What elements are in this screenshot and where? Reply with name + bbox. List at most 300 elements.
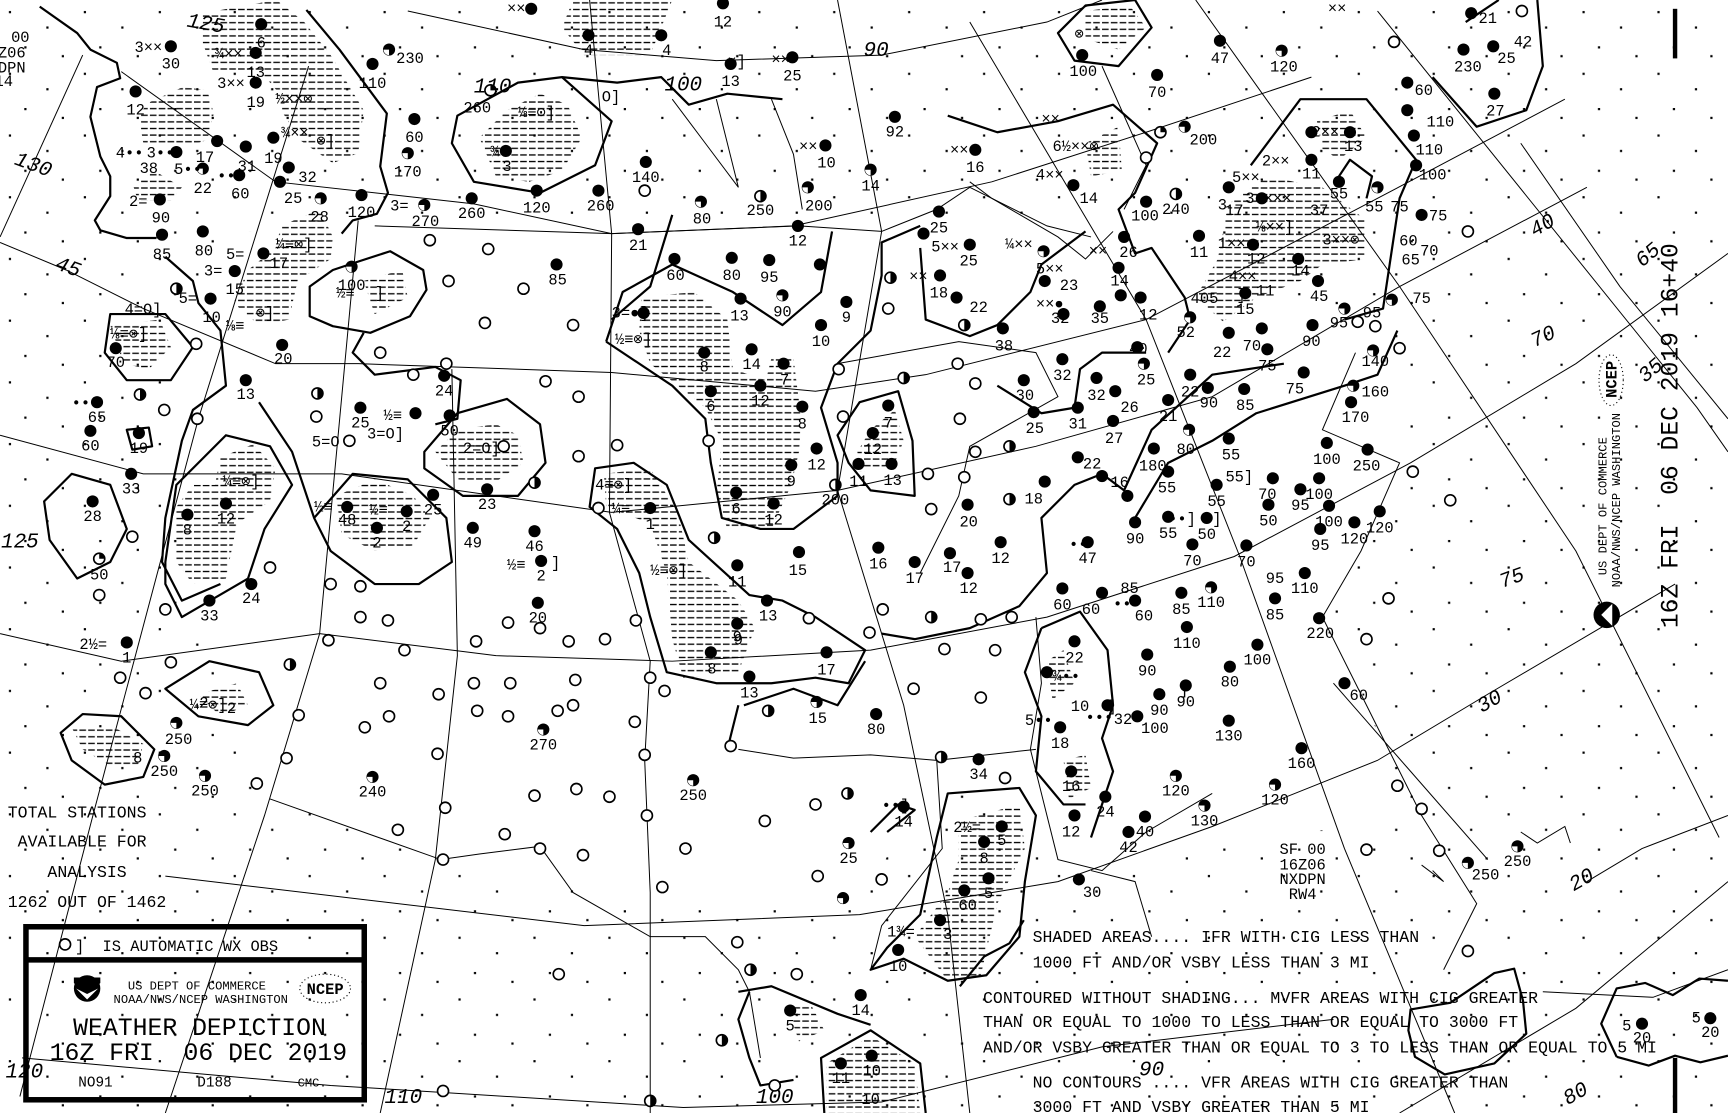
station values: 250 [150, 763, 178, 781]
station values: 100 [1244, 651, 1271, 669]
station values: 13 [237, 386, 255, 404]
grid degree labels: 75 [1497, 564, 1528, 595]
station values: 90 [1302, 333, 1321, 351]
station values: 49 [464, 535, 482, 553]
grid degree labels: 100 [756, 1087, 794, 1110]
present weather symbols: 3×××× [1245, 190, 1292, 208]
present weather symbols: ¼≡⊗] [190, 697, 227, 715]
station values: 70 [107, 354, 125, 372]
station values: 9 [734, 632, 743, 650]
present weather symbols: ¾ [490, 143, 500, 161]
present weather symbols: ] [1179, 681, 1188, 699]
grid degree labels: 70 [1527, 322, 1560, 354]
station values: 110 [1173, 635, 1201, 653]
present weather symbols: 2=O] [463, 440, 500, 458]
station values: 9 [733, 628, 742, 646]
station values: 28 [310, 208, 329, 226]
explanatory notes: CONTOURED WITHOUT SHADING... MVFR AREAS WITH CIG GREATER [983, 989, 1538, 1008]
station values: 22 [194, 180, 212, 198]
present weather symbols: 5•• [174, 161, 202, 179]
station values: 32 [1051, 310, 1069, 328]
station values: 23 [1060, 277, 1078, 295]
station values: 14 [742, 356, 761, 374]
station values: 85 [1120, 580, 1139, 598]
station values: 90 [152, 210, 170, 228]
station values: 11 [1256, 282, 1274, 300]
present weather symbols: ½≡⊗] [615, 331, 652, 349]
station values: 5 [997, 832, 1006, 850]
station values: 14 [1110, 272, 1129, 290]
present weather symbols: 4≡⊗] [595, 476, 632, 494]
grid degree labels: 120 [5, 1062, 43, 1085]
present weather symbols: ¼≡ [612, 501, 630, 519]
present weather symbols: 3= [204, 262, 222, 280]
station values: 100 [1069, 63, 1097, 81]
station values: 260 [587, 197, 615, 215]
station values: 230 [396, 50, 424, 68]
present weather symbols: 5= [226, 246, 244, 264]
station values: 85 [153, 246, 171, 264]
station values: 13 [721, 73, 740, 91]
top-left header fragment [0, 29, 30, 91]
station values: 42 [1119, 839, 1138, 857]
present weather symbols: ¼≡⊗] [223, 473, 260, 491]
station values: 33 [122, 481, 140, 499]
station values: 2 [536, 568, 546, 586]
station values: 240 [1162, 201, 1190, 219]
station values: 60 [1135, 607, 1153, 625]
station values: 75 [1286, 380, 1304, 398]
station values: 250 [1504, 853, 1531, 871]
station values: 32 [1114, 711, 1132, 729]
station values: 14 [851, 1002, 870, 1020]
station values: 95 [1330, 314, 1348, 332]
station values: 100 [1315, 514, 1343, 532]
left text: total stations: AVAILABLE FOR [18, 832, 147, 851]
station values: 120 [523, 200, 551, 218]
present weather symbols: ½××⊗ [276, 91, 313, 109]
coastlines and borders [270, 66, 1728, 1058]
icon: side NCEP logo: NCEP [1604, 361, 1622, 398]
station values: 12 [1139, 307, 1158, 325]
present weather symbols: ⅛≡ [226, 318, 244, 336]
present weather symbols: ¾×× [215, 45, 243, 63]
station values: 14 [1291, 262, 1310, 280]
present weather symbols: 2×× [1311, 124, 1339, 142]
analysis code block: NXDPN [1279, 871, 1326, 889]
side date label: 16Z FRI 06 DEC 2019 16+40 [1657, 243, 1685, 628]
station values: 65 [1401, 251, 1420, 269]
station values: 70 [1148, 84, 1166, 102]
registration bars [1673, 9, 1677, 1113]
grid degree labels: 40 [1527, 211, 1560, 243]
station values: 30 [1016, 387, 1034, 405]
station values: 85 [1172, 601, 1191, 619]
IFR shaded areas [72, 0, 1367, 1113]
present weather symbols: 5=O [312, 433, 340, 451]
station values: 85 [1266, 606, 1284, 624]
present weather symbols: 4×× [1036, 167, 1064, 185]
station values: 8 [707, 660, 717, 678]
station values: 80 [693, 211, 711, 229]
present weather symbols: 5×× [931, 238, 959, 256]
automatic observation key: ] [75, 938, 84, 956]
station values: 60 [1415, 82, 1433, 100]
grid degree labels: 65 [1632, 239, 1666, 273]
station values: 170 [1342, 409, 1369, 427]
station values: 95 [1291, 497, 1310, 515]
station values: 60 [1350, 687, 1368, 705]
station values: 22 [1083, 455, 1101, 473]
explanatory notes: 1000 FT AND/OR VSBY LESS THAN 3 MI [1033, 954, 1370, 973]
station values: 250 [1472, 866, 1499, 884]
present weather symbols: •• [1113, 595, 1132, 613]
station values: 85 [1236, 397, 1255, 415]
grid degree labels: 35 [1635, 355, 1669, 389]
station values: 270 [529, 736, 557, 754]
present weather symbols: ⅛≡⊗] [110, 325, 147, 343]
station values: 17 [905, 570, 924, 588]
station values: 90 [773, 303, 792, 321]
station values: 405 [1191, 290, 1218, 308]
station values: 18 [1051, 735, 1069, 753]
present weather symbols: 3=●] [612, 304, 649, 322]
station values: 12 [217, 510, 235, 528]
grid degree labels: 130 [11, 149, 54, 183]
present weather symbols: 5 [1622, 1017, 1631, 1035]
station values: 20 [274, 351, 293, 369]
station values: 19 [130, 440, 148, 458]
station values: 25 [424, 502, 442, 520]
station values: 30 [162, 55, 180, 73]
present weather symbols: ×× [950, 141, 968, 159]
station values: 55 [1365, 199, 1383, 217]
station values: 9 [842, 309, 851, 327]
station values: 34 [969, 766, 988, 784]
station values: 26 [1119, 244, 1138, 262]
side agency label: NOAA/NWS/NCEP WASHINGTON [1610, 413, 1624, 587]
grid degree labels: 110 [474, 77, 511, 100]
grid degree labels: 80 [1560, 1079, 1593, 1111]
station values: 24 [242, 590, 261, 608]
station values: 14 [1080, 190, 1098, 208]
station values: 55 [1330, 185, 1348, 203]
station values: 38 [140, 160, 158, 178]
station values: 1 [122, 649, 131, 667]
station values: 19 [246, 94, 265, 112]
department text: NOAA/NWS/NCEP WASHINGTON [114, 993, 288, 1007]
station values: 37 [1310, 202, 1328, 220]
analysis code block [1279, 841, 1326, 904]
station values: 65 [88, 409, 106, 427]
station values: 8 [133, 750, 142, 768]
station values: 21 [629, 237, 647, 255]
station values: 25 [284, 190, 302, 208]
station values: 16 [966, 159, 985, 177]
legend codes [78, 1076, 327, 1092]
station values: 17 [943, 559, 961, 577]
station values: 250 [165, 731, 192, 749]
present weather symbols: ¼×× [1005, 236, 1033, 254]
station values: 8 [798, 416, 807, 434]
station values: 25 [783, 67, 802, 85]
present weather symbols: ] [1236, 287, 1246, 305]
chart title: WEATHER DEPICTION [73, 1015, 326, 1043]
station values: 25 [959, 253, 978, 271]
station values: 11 [1302, 166, 1321, 184]
station values: 70 [1243, 337, 1261, 355]
grid degree labels: 20 [1566, 865, 1599, 897]
present weather symbols: ••] [1168, 510, 1196, 528]
station values: 92 [886, 124, 904, 142]
present weather symbols: 3××⊗ [1322, 232, 1359, 250]
department text [114, 980, 288, 1007]
station values: 21 [1159, 408, 1177, 426]
present weather symbols: ½≡ [314, 498, 333, 516]
grid degree labels: 45 [52, 254, 83, 284]
left text: total stations: 1262 OUT OF 1462 [8, 893, 166, 912]
station values: 130 [1215, 728, 1243, 746]
station values: 5 [786, 1017, 795, 1035]
legend codes: CMC. [298, 1077, 327, 1091]
grid degree labels: 110 [385, 1087, 422, 1110]
station values: 4 [584, 42, 593, 60]
station values: 32 [1053, 367, 1072, 385]
station values: 70 [1420, 243, 1439, 261]
station values: 80 [723, 267, 741, 285]
station values: 4 [662, 42, 671, 60]
station values: 12 [1062, 823, 1080, 841]
station values: 22 [1181, 384, 1199, 402]
station values: 14 [894, 813, 913, 831]
station values: 9 [787, 473, 796, 491]
station values: 16 [1110, 474, 1129, 492]
station values: 13 [883, 472, 902, 490]
station values: 15 [1236, 301, 1255, 319]
station values: 55 [1222, 447, 1240, 465]
station values: 110 [1291, 580, 1319, 598]
station values: 35 [1091, 310, 1109, 328]
station values: 20 [1701, 1024, 1720, 1042]
station values: 2 [227, 700, 236, 718]
station values: 17 [270, 255, 288, 273]
grid degree labels: 100 [664, 74, 702, 97]
station values: 100 [338, 277, 365, 295]
station values: 2 [372, 535, 382, 553]
station values: 47 [1211, 50, 1229, 68]
station values: 75 [1390, 199, 1409, 217]
present weather symbols: ⊗] [256, 304, 274, 322]
station values: 13 [730, 308, 749, 326]
station values: 60 [1053, 596, 1072, 614]
station values: 260 [463, 99, 491, 117]
station values: 75 [1412, 290, 1431, 308]
icon: side NOAA logo [1594, 602, 1620, 628]
present weather symbols: ] [1212, 510, 1221, 528]
present weather symbols: 1¾= [887, 924, 915, 942]
station values: 47 [1078, 550, 1097, 568]
station values: 95 [1311, 537, 1329, 555]
station values: 10 [202, 309, 221, 327]
station values: 30 [1083, 884, 1101, 902]
present weather symbols: ×× [1089, 243, 1107, 261]
station values: 19 [264, 150, 283, 168]
station values: 12 [714, 13, 732, 31]
grid degree labels: 90 [1139, 1060, 1164, 1083]
station values: 60 [231, 185, 250, 203]
present weather symbols: ⊗] [316, 132, 335, 150]
present weather symbols: 2×× [1262, 152, 1290, 170]
present weather symbols: ¼≡⊗] [276, 236, 313, 254]
station values: 10 [862, 1063, 881, 1081]
station values: 12 [1247, 250, 1266, 268]
present weather symbols: ⅛≡⊙] [518, 104, 555, 122]
grid degree labels: 125 [185, 11, 226, 40]
side agency label: US DEPT OF COMMERCE [1597, 437, 1611, 575]
present weather symbols: 55] [1225, 469, 1253, 487]
station values: 3 [502, 158, 512, 176]
grid degree labels: 90 [864, 40, 889, 63]
present weather symbols: ••• [1085, 709, 1113, 727]
present weather symbols: •• [217, 168, 236, 186]
explanatory notes: THAN OR EQUAL TO 1000 TO LESS THAN OR EQUAL TO 3000 FT [983, 1013, 1518, 1032]
station values: 90 [1126, 530, 1144, 548]
station values: 20 [529, 610, 547, 628]
station values: 75 [1429, 207, 1447, 225]
station values: 33 [200, 607, 219, 625]
present weather symbols: ×× [771, 51, 790, 69]
present weather symbols: ½≡ [336, 285, 355, 303]
present weather symbols: 2½= [953, 819, 981, 837]
station values: 28 [83, 508, 102, 526]
station values: 2 [402, 518, 411, 536]
station values: 100 [1419, 167, 1446, 185]
explanatory notes [983, 928, 1657, 1113]
present weather symbols: 3×× [134, 39, 162, 57]
station values: 6 [257, 34, 266, 52]
station values: 38 [995, 337, 1013, 355]
station values: 60 [958, 897, 977, 915]
station values: 17 [817, 661, 836, 679]
station values: 60 [666, 267, 685, 285]
station values: 45 [1310, 288, 1328, 306]
present weather symbols: 3×× [217, 75, 245, 93]
station values: 25 [1137, 372, 1155, 390]
station values: 240 [359, 784, 386, 802]
station values: 15 [226, 281, 244, 299]
station values: 22 [1213, 344, 1231, 362]
station values: 20 [1633, 1029, 1651, 1047]
station values: 11 [728, 573, 747, 591]
station values: 170 [394, 163, 422, 181]
present weather symbols: ×× [909, 268, 928, 286]
icon: NCEP logo [300, 974, 350, 1003]
station values: 40 [1136, 823, 1154, 841]
station values: 70 [1258, 486, 1277, 504]
icon: NOAA logo [74, 975, 100, 1002]
station values: 13 [740, 685, 759, 703]
station values: 16 [869, 556, 888, 574]
station values: 160 [1288, 755, 1315, 773]
analysis code block: RW4 [1289, 886, 1316, 904]
present weather symbols: ½≡ [369, 502, 388, 520]
station values: 250 [1353, 458, 1380, 476]
automatic observation key: IS AUTOMATIC WX OBS [103, 938, 278, 956]
station values: 110 [359, 75, 386, 93]
side agency label [1597, 413, 1624, 587]
station values: 12 [764, 512, 783, 530]
station values: 10 [889, 958, 907, 976]
present weather symbols: 6½××⊗ [1052, 138, 1099, 156]
station values: 3 [943, 926, 952, 944]
station values: 12 [991, 550, 1010, 568]
department text: US DEPT OF COMMERCE [128, 980, 266, 994]
present weather symbols: ½≡ [384, 407, 402, 425]
station values: 80 [1221, 674, 1239, 692]
station values: 12 [959, 580, 978, 598]
station values: 13 [1344, 138, 1363, 156]
station values: 120 [348, 204, 375, 222]
station values: 60 [81, 438, 100, 456]
station values: 31 [238, 158, 256, 176]
station values: 260 [458, 205, 486, 223]
station values: 25 [1026, 420, 1044, 438]
station values: 22 [969, 299, 988, 317]
station values: 15 [808, 710, 827, 728]
station values: 60 [405, 129, 424, 147]
chart title [50, 1015, 347, 1068]
station values: 70 [1237, 553, 1256, 571]
present weather symbols: O] [602, 88, 620, 106]
station values: 90 [1177, 693, 1195, 711]
station values: 90 [1200, 395, 1218, 413]
station values: 13 [246, 64, 265, 82]
station values: 17 [196, 149, 214, 167]
station values: 6 [1116, 288, 1125, 306]
station values: 25 [930, 220, 948, 238]
analysis code block: 16Z06 [1279, 856, 1326, 874]
station values: 120 [1162, 783, 1190, 801]
station values: 48 [338, 512, 356, 530]
station values: 250 [747, 202, 774, 220]
station values: 13 [759, 607, 777, 625]
station values: 52 [1177, 324, 1195, 342]
station values: 14 [861, 178, 880, 196]
station values: 12 [864, 441, 882, 459]
station values: 100 [1305, 486, 1333, 504]
station values: 12 [751, 393, 770, 411]
present weather symbols: 1×× [1218, 235, 1245, 253]
present weather symbols: ½≡⊗] [650, 562, 687, 580]
station values: 32 [1087, 387, 1106, 405]
station values: 25 [351, 415, 370, 433]
present weather symbols: ×× [1041, 110, 1060, 128]
station values: 10 [817, 155, 836, 173]
station values: 7 [780, 372, 789, 390]
station values: 18 [930, 285, 948, 303]
legend codes: D188 [197, 1076, 232, 1092]
present weather symbols: ] [551, 555, 560, 573]
station values: 27 [1105, 430, 1123, 448]
station values: 23 [478, 496, 496, 514]
present weather symbols: •• [1069, 536, 1087, 554]
station values: 80 [1177, 441, 1195, 459]
station values: 12 [807, 456, 826, 474]
station values: 110 [1426, 114, 1454, 132]
present weather symbols: ⅛××] [1256, 218, 1293, 236]
present weather symbols: 2= [129, 193, 147, 211]
station values: 7 [884, 415, 893, 433]
